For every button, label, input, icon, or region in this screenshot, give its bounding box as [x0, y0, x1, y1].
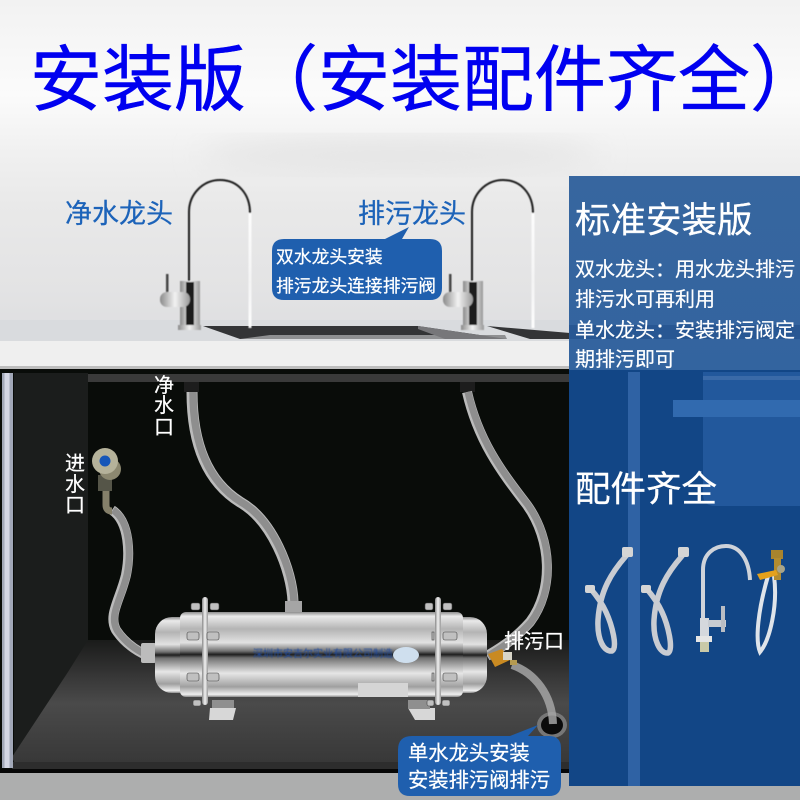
label: drain outlet: 排污口	[504, 630, 564, 653]
panel heading: 标准安装版	[575, 200, 753, 240]
label: purified outlet	[154, 374, 174, 439]
stainless steel filter housing	[141, 597, 487, 720]
accessory: drain valve with tube	[757, 550, 785, 652]
label: drain faucet: 排污龙头	[358, 199, 466, 229]
label: inlet: 水	[65, 473, 85, 496]
callout: single faucet installation: 单水龙头安装	[408, 742, 530, 765]
accessories heading: 配件齐全	[575, 469, 717, 509]
drain outlet hole	[537, 712, 567, 738]
title: 安装版（安装配件齐全）	[30, 41, 800, 121]
label: purified outlet: 净	[154, 374, 174, 397]
panel body text: 排污水可再利用	[575, 288, 715, 311]
panel body text	[575, 258, 795, 371]
panel body text: 双水龙头：用水龙头排污	[575, 258, 795, 281]
callout: dual faucet installation	[272, 227, 442, 300]
callout: dual faucet installation: 双水龙头安装	[276, 247, 383, 267]
accessory: chrome faucet	[696, 546, 750, 652]
accessory: braided hose 1	[585, 547, 633, 651]
label: purified outlet: 口	[154, 417, 174, 439]
hose: inlet with fitting	[92, 448, 147, 655]
label: purified faucet: 净水龙头	[65, 199, 173, 229]
countertop and sinks	[0, 320, 570, 369]
callout: single faucet installation: 安装排污阀排污	[408, 769, 550, 792]
label: inlet	[65, 452, 85, 517]
faucet: purified water	[160, 180, 252, 330]
drain valve and hose	[488, 649, 553, 724]
callout: single faucet installation	[398, 725, 561, 796]
panel body text: 期排污即可	[575, 348, 675, 371]
label: purified outlet: 水	[154, 394, 174, 417]
label: inlet: 口	[65, 495, 85, 517]
faucet: drain water	[443, 180, 534, 330]
label: inlet: 进	[65, 452, 85, 475]
hose: drain faucet	[460, 382, 548, 656]
kitchen wall background	[0, 0, 800, 340]
hose: purified water	[184, 382, 302, 613]
accessory: braided hose 2	[641, 547, 689, 653]
panel body text: 单水龙头：安装排污阀定	[575, 319, 795, 342]
side panel: standard installation	[569, 176, 800, 786]
stainless steel filter housing: 深圳市安吉尔实业有限公司制造	[253, 647, 393, 660]
callout: dual faucet installation: 排污龙头连接排污阀	[276, 276, 436, 296]
under-sink cabinet	[0, 369, 800, 800]
